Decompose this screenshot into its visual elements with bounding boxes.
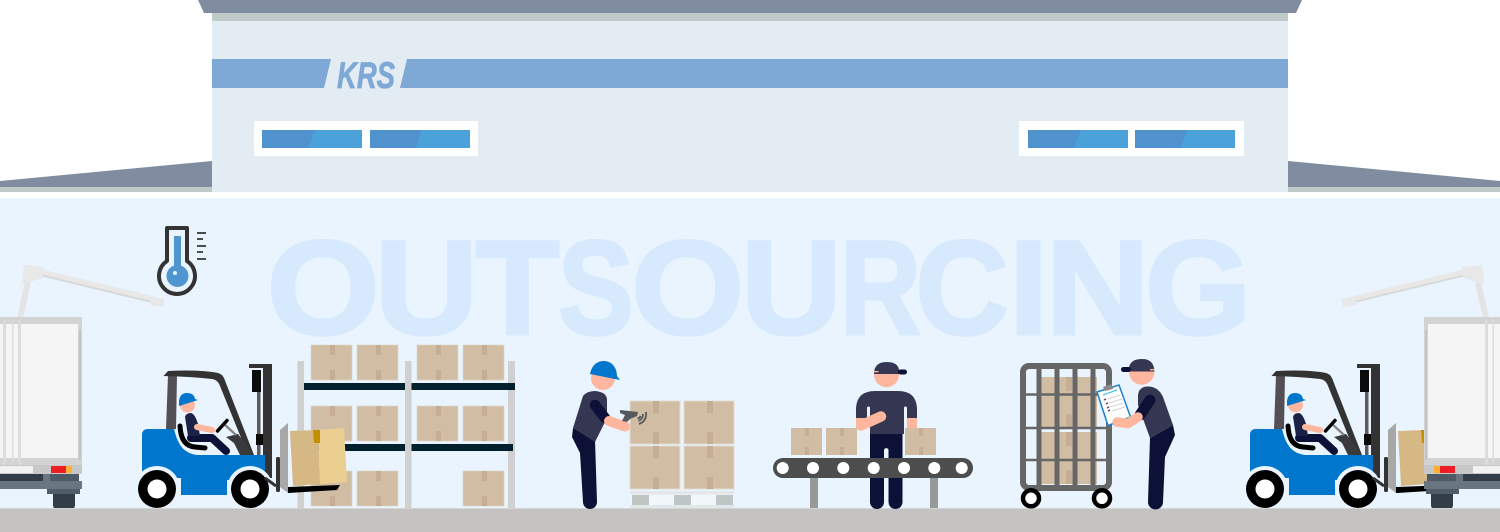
torso [856, 391, 917, 434]
worker at conveyor belt [773, 362, 973, 509]
floor [0, 508, 1500, 532]
roll cage with boxes [1023, 366, 1110, 506]
watermark heading: O [631, 214, 744, 363]
icon: thermometer [159, 228, 206, 294]
left truck with dock arm [0, 266, 165, 509]
building wall [212, 20, 1288, 192]
KRS logo: KRS [337, 55, 395, 96]
worker scanning boxes on pallet [572, 361, 734, 509]
warehouse building [0, 0, 1500, 192]
left side roof [0, 161, 212, 187]
right forklift with driver and box [1242, 364, 1455, 512]
left forklift with driver and box [134, 364, 347, 512]
brand stripe [212, 59, 1288, 88]
right windows [1019, 121, 1244, 156]
clipboard [1097, 384, 1130, 426]
watermark heading: N [1046, 214, 1150, 363]
sky background [0, 0, 1500, 198]
watermark heading: O [267, 214, 380, 363]
right side roof [1288, 161, 1500, 187]
conveyor [773, 458, 973, 508]
watermark heading: U [375, 214, 478, 363]
watermark heading: I [1009, 214, 1048, 363]
watermark heading: T [476, 214, 559, 363]
watermark heading: C [915, 214, 1009, 363]
watermark heading: R [840, 214, 921, 363]
right truck with dock arm [1341, 266, 1500, 509]
conveyor boxes [791, 428, 936, 455]
legs [870, 434, 902, 509]
storage racks with boxes [298, 345, 515, 508]
watermark heading: S [558, 214, 634, 363]
warehouse interior background [0, 198, 1500, 508]
left windows [254, 121, 478, 156]
worker with clipboard [1097, 359, 1175, 510]
watermark heading: G [1145, 214, 1251, 363]
watermark heading: U [741, 214, 842, 363]
main roof [198, 0, 1302, 13]
worker figure [572, 361, 646, 509]
pallet of boxes [630, 401, 734, 508]
